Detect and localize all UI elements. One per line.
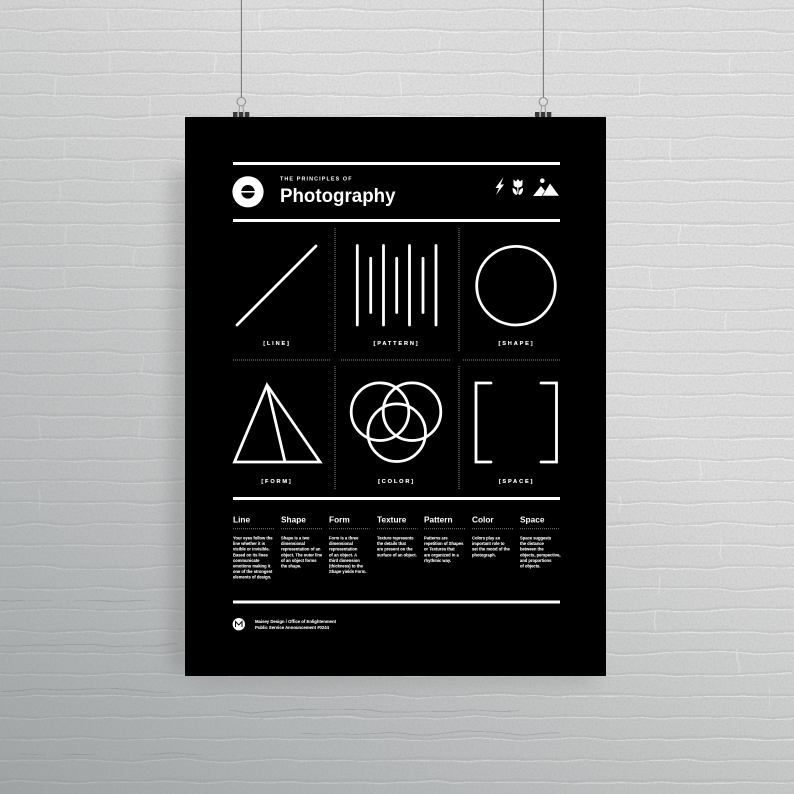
- label: [SHAPE]: [499, 341, 534, 347]
- icon: flower: [512, 179, 523, 195]
- pattern glyph: [357, 246, 436, 325]
- column: color: [472, 514, 513, 557]
- icon: mountains: [533, 178, 560, 196]
- label: [COLOR]: [378, 479, 415, 485]
- body: and proportions: [520, 558, 552, 563]
- body: visible or invisible.: [233, 547, 270, 552]
- eyebrow: THE PRINCIPLES OF: [280, 176, 353, 182]
- body: the details that: [377, 541, 407, 546]
- body: rhythmic way.: [424, 558, 451, 563]
- rule: footer top: [233, 600, 560, 604]
- title: [280, 176, 396, 207]
- poster: [185, 117, 606, 676]
- body: of an object forms: [281, 558, 317, 563]
- heading: Line: [233, 514, 250, 524]
- body: surface of an object.: [377, 552, 417, 557]
- clip right: [535, 98, 551, 117]
- line glyph: [237, 246, 316, 325]
- body: Patterns are: [424, 536, 448, 540]
- label: [SPACE]: [499, 479, 534, 485]
- icon: footer logo: [233, 618, 245, 630]
- panel: shape: [477, 246, 555, 347]
- panel: pattern: [357, 246, 436, 347]
- body: of an object. A: [329, 552, 357, 557]
- heading: Color: [472, 514, 494, 524]
- label: [FORM]: [261, 479, 293, 485]
- body: third dimension: [329, 558, 360, 563]
- brackets glyph: [476, 383, 556, 462]
- footer: [233, 618, 337, 630]
- body: are organized in a: [424, 552, 460, 557]
- column: line: [233, 514, 274, 580]
- body: between the: [520, 547, 544, 552]
- body: dimensional: [281, 541, 305, 546]
- body: object. The outer line: [281, 552, 323, 557]
- body: emotions making it: [233, 564, 271, 568]
- rule: top: [233, 162, 560, 165]
- body: Shape yields Form.: [329, 569, 367, 574]
- grid dividers: [233, 228, 560, 490]
- panel: color: [351, 383, 441, 485]
- heading: Space: [520, 514, 545, 524]
- body: are present on the: [377, 547, 413, 552]
- body: line whether it is: [233, 541, 266, 546]
- circle glyph: [477, 246, 555, 325]
- body: Your eyes follow the: [233, 536, 273, 540]
- body: important role to: [472, 541, 505, 546]
- body: set the mood of the: [472, 547, 510, 552]
- body: representation: [329, 547, 358, 552]
- triangle glyph: [234, 385, 320, 462]
- body: representation of an: [281, 547, 321, 552]
- label: [LINE]: [263, 341, 291, 347]
- body: or Textures that: [424, 547, 455, 552]
- column: pattern: [424, 514, 465, 563]
- body: repetition of Shapes: [424, 541, 464, 546]
- body: Space suggests: [520, 536, 552, 540]
- body: Based on its lines: [233, 552, 269, 557]
- poster shadow: [172, 170, 595, 682]
- footer text: Public Service Announcement #0244: [255, 625, 330, 630]
- body: communicate: [233, 558, 260, 563]
- wire right: [542, 0, 544, 98]
- body: dimensional: [329, 541, 353, 546]
- icon: lightning: [496, 177, 504, 195]
- overlapping circles glyph: [351, 383, 441, 462]
- heading: Form: [329, 514, 350, 524]
- body: Shape is a two: [281, 536, 310, 540]
- heading: Pattern: [424, 514, 453, 524]
- panel: line: [237, 246, 316, 347]
- poster board: [185, 117, 606, 676]
- column: texture: [377, 514, 418, 557]
- column: space: [520, 514, 560, 568]
- body: the distance: [520, 541, 545, 546]
- body: one of the strongest: [233, 569, 273, 574]
- body: Form is a three: [329, 536, 359, 540]
- heading: Texture: [377, 514, 407, 524]
- body: Texture represents: [377, 536, 414, 540]
- wire left: [240, 0, 242, 98]
- body: the shape.: [281, 564, 301, 568]
- body: of objects.: [520, 564, 540, 568]
- body: Colors play an: [472, 536, 501, 540]
- heading: Shape: [281, 514, 306, 524]
- body: (thickness) to the: [329, 564, 364, 568]
- clip left: [233, 98, 249, 117]
- footer text: Maisey Design / Office of Enlightenment: [255, 619, 337, 624]
- main title: Photography: [280, 185, 396, 207]
- header logo: [232, 176, 264, 207]
- panel: form: [234, 385, 320, 485]
- rule: header bottom: [233, 219, 560, 222]
- body: photograph.: [472, 552, 496, 557]
- rule: grid bottom: [233, 497, 560, 500]
- hanging wires and clips: [233, 0, 551, 117]
- label: [PATTERN]: [374, 341, 419, 347]
- panel: space: [476, 383, 556, 485]
- column: shape: [281, 514, 323, 568]
- body: elements of design.: [233, 575, 271, 580]
- header icons: [496, 177, 560, 196]
- body: objects, perspective,: [520, 552, 560, 557]
- column: form: [329, 514, 370, 574]
